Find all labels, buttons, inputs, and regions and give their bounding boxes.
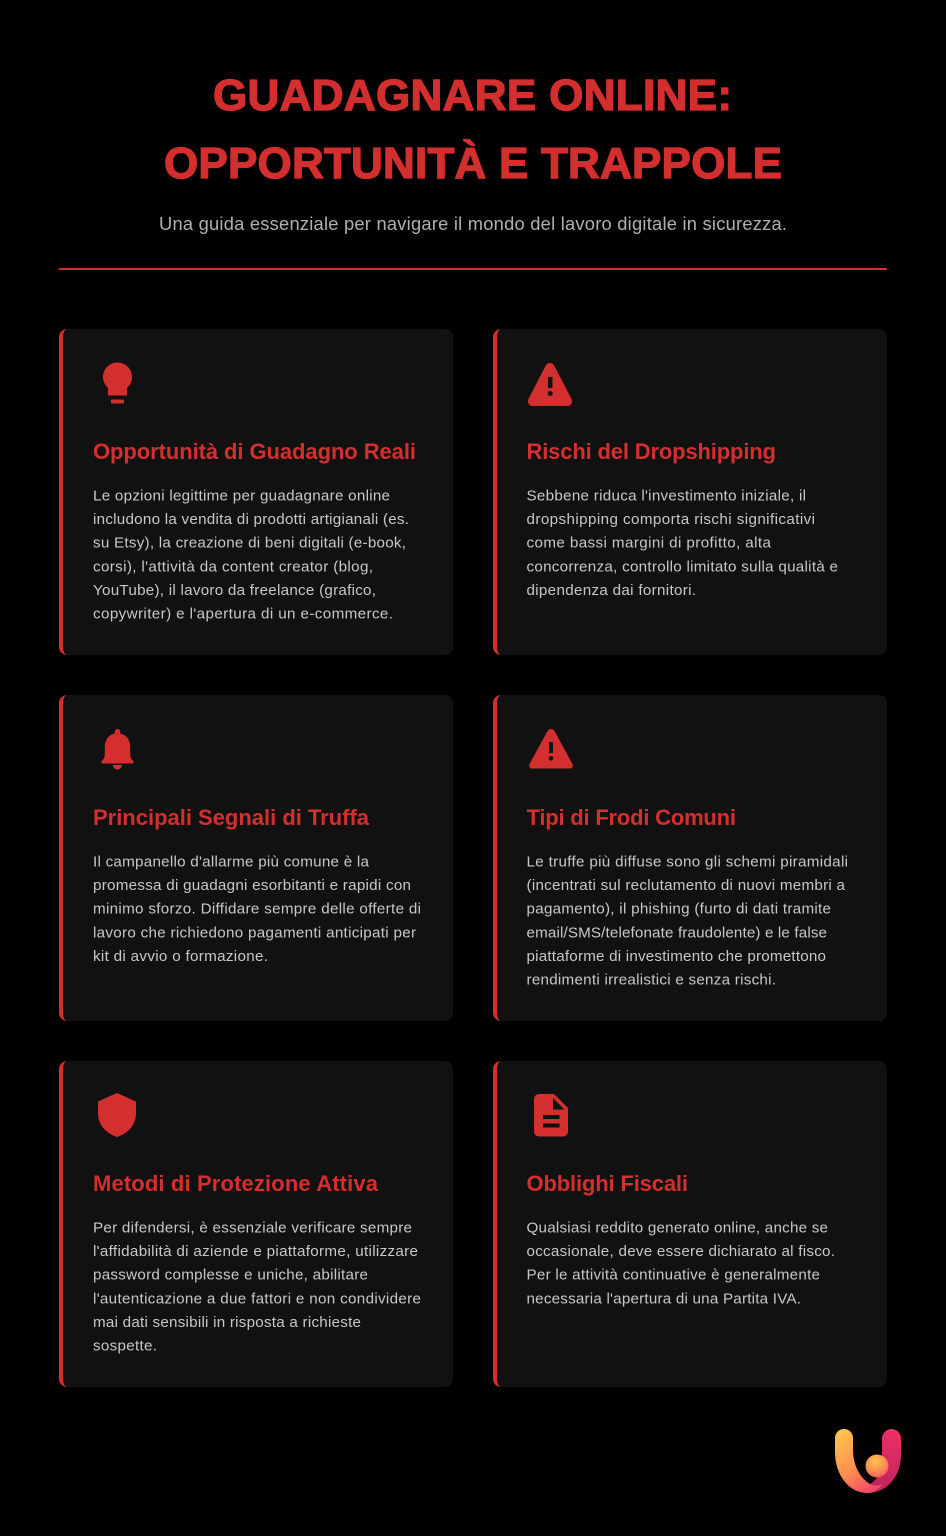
heading: Opportunità di Guadagno Reali <box>93 439 416 464</box>
text block: kit di avvio o formazione. <box>93 948 268 965</box>
heading: Rischi del Dropshipping <box>526 439 776 464</box>
title: OPPORTUNITÀ E TRAPPOLE <box>164 138 782 188</box>
text block <box>526 1220 835 1307</box>
icon: warning triangle <box>528 363 572 406</box>
text block: rendimenti irrealistici e senza rischi. <box>526 972 776 988</box>
text block: Sebbene riduca l'investimento iniziale, il <box>526 488 806 504</box>
text block <box>526 488 838 599</box>
text block: YouTube), il lavoro da freelance (grafico, <box>93 582 376 599</box>
text block: mai dati sensibili in risposta a richieste <box>93 1314 361 1331</box>
text block: su Etsy), la creazione di beni digitali (e-book, <box>93 535 406 552</box>
text block: Il campanello d'allarme più comune è la <box>93 854 370 870</box>
panel: tipi di frodi comuni <box>493 695 887 1021</box>
text block <box>93 1220 421 1354</box>
panel: metodi di protezione attiva <box>59 1061 453 1387</box>
text block: piattaforme di investimento che promettono <box>526 948 826 965</box>
text block: sospette. <box>93 1338 157 1354</box>
icon: light bulb <box>103 362 132 404</box>
text block: Per difendersi, è essenziale verificare sempre <box>93 1220 412 1236</box>
text block: Qualsiasi reddito generato online, anche se <box>526 1220 828 1236</box>
text block: necessaria l'apertura di una Partita IVA. <box>526 1290 801 1307</box>
title: GUADAGNARE ONLINE: <box>213 71 732 120</box>
text block: dipendenza dai fornitori. <box>526 582 696 599</box>
text block: l'affidabilità di aziende e piattaforme, utilizzare <box>93 1243 418 1260</box>
panel: rischi del dropshipping <box>493 329 887 655</box>
text block: email/SMS/telefonate fraudolente) e le false <box>526 924 827 941</box>
text block: minimo sforzo. Diffidare sempre delle offerte di <box>93 901 421 918</box>
title <box>164 71 782 188</box>
text block: l'autenticazione a due fattori e non condividere <box>93 1290 421 1307</box>
text block <box>93 488 409 622</box>
text block: corsi), l'attività da content creator (blog, <box>93 558 373 575</box>
icon: shield <box>98 1093 136 1137</box>
panel: obblighi fiscali <box>493 1061 887 1387</box>
text block: Per le attività continuative è generalmente <box>526 1267 820 1284</box>
heading: Obblighi Fiscali <box>526 1171 688 1196</box>
icon: bell <box>101 729 134 770</box>
text block: dropshipping comporta rischi significativi <box>526 511 815 528</box>
text block: pagamento), il phishing (furto di dati tramite <box>526 901 831 918</box>
text block: come bassi margini di profitto, alta <box>526 535 772 552</box>
heading: Principali Segnali di Truffa <box>93 805 370 830</box>
panel: opportunità di guadagno reali <box>59 329 453 655</box>
text block: lavoro che richiedono pagamenti anticipati per <box>93 924 416 941</box>
text block: occasionale, deve essere dichiarato al fisco. <box>526 1243 835 1260</box>
heading: Metodi di Protezione Attiva <box>93 1171 379 1196</box>
text block: copywriter) e l'apertura di un e-commerce. <box>93 606 393 622</box>
panel: principali segnali di truffa <box>59 695 453 1021</box>
heading: Tipi di Frodi Comuni <box>526 805 736 830</box>
icon: logo <box>835 1429 901 1493</box>
icon: warning triangle <box>529 729 573 768</box>
text block: concorrenza, controllo limitato sulla qualità e <box>526 558 838 575</box>
text block <box>526 854 848 988</box>
text block: Le opzioni legittime per guadagnare online <box>93 488 390 504</box>
text block: promessa di guadagni esorbitanti e rapidi con <box>93 877 411 894</box>
icon: document <box>534 1094 568 1136</box>
text block <box>93 854 421 965</box>
text block: Le truffe più diffuse sono gli schemi piramidali <box>526 854 848 870</box>
text block: password complesse e uniche, abilitare <box>93 1267 368 1284</box>
text block: (incentrati sul reclutamento di nuovi membri a <box>526 877 846 894</box>
subtitle: Una guida essenziale per navigare il mondo del lavoro digitale in sicurezza. <box>159 213 787 234</box>
text block: includono la vendita di prodotti artigianali (es. <box>93 511 409 528</box>
